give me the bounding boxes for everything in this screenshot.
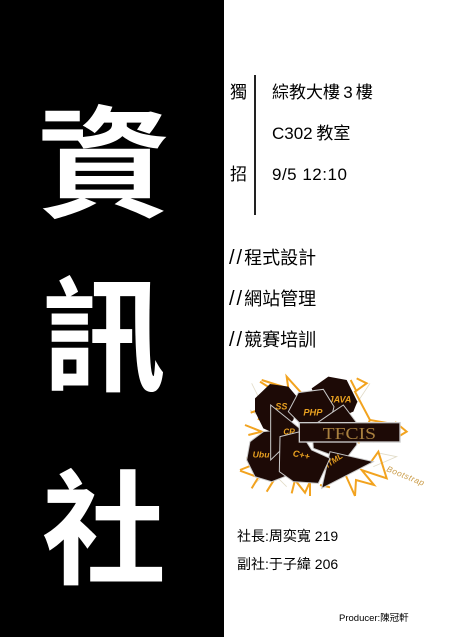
logo triangle: HTML: HTML — [321, 451, 344, 472]
logo octagon: Ubuntu — [247, 430, 293, 482]
logo pale thin rays — [250, 383, 397, 487]
logo octagon: Ubuntu: Ubu — [253, 449, 270, 459]
logo banner: TFCIS: TFCIS — [323, 424, 376, 443]
text: contest training: //競賽培訓 — [229, 329, 316, 351]
text: producer credit: Producer:陳冠軒 — [339, 613, 409, 624]
heading: 獨: 獨 — [230, 83, 247, 102]
text: vice president: 副社:于子緯 206 — [237, 556, 338, 572]
text: date and time: 9/5 12:10 — [272, 165, 347, 184]
logo octagon: PHP — [288, 389, 334, 425]
logo octagon: back hexagon — [312, 405, 358, 460]
vertical divider line — [254, 75, 256, 215]
logo octagon: C++: C++ — [292, 448, 311, 462]
text: website management: //網站管理 — [229, 288, 316, 310]
text: location building: 綜教大樓 3 樓 — [272, 83, 373, 102]
logo octagon: JAVA — [312, 377, 357, 418]
logo octagon: CSS: SS — [275, 401, 287, 411]
title character: 訊: 訊 — [42, 237, 166, 417]
logo triangle: CR — [271, 405, 302, 460]
title character: 資: 資 — [37, 67, 171, 243]
title character: 社: 社 — [42, 430, 166, 610]
text: club president: 社長:周奕寬 219 — [237, 528, 338, 544]
logo octagon: C++ — [279, 432, 330, 483]
logo banner: TFCIS — [299, 423, 400, 443]
logo starburst rays — [240, 377, 407, 496]
logo octagon: JAVA: JAVA — [329, 395, 351, 405]
logo triangle: CR: CR — [283, 428, 295, 437]
logo triangle: HTML — [321, 451, 373, 488]
logo: TFCIS — [240, 374, 426, 496]
panel: black left column with club name — [0, 0, 224, 637]
text: classroom: C302 教室 — [272, 124, 350, 143]
logo octagon: CSS — [255, 384, 298, 435]
logo octagon: PHP: PHP — [303, 407, 323, 417]
heading: 招: 招 — [230, 165, 247, 184]
logo label: Bootstrap: Bootstrap — [385, 464, 426, 488]
text: programming: //程式設計 — [229, 247, 316, 269]
